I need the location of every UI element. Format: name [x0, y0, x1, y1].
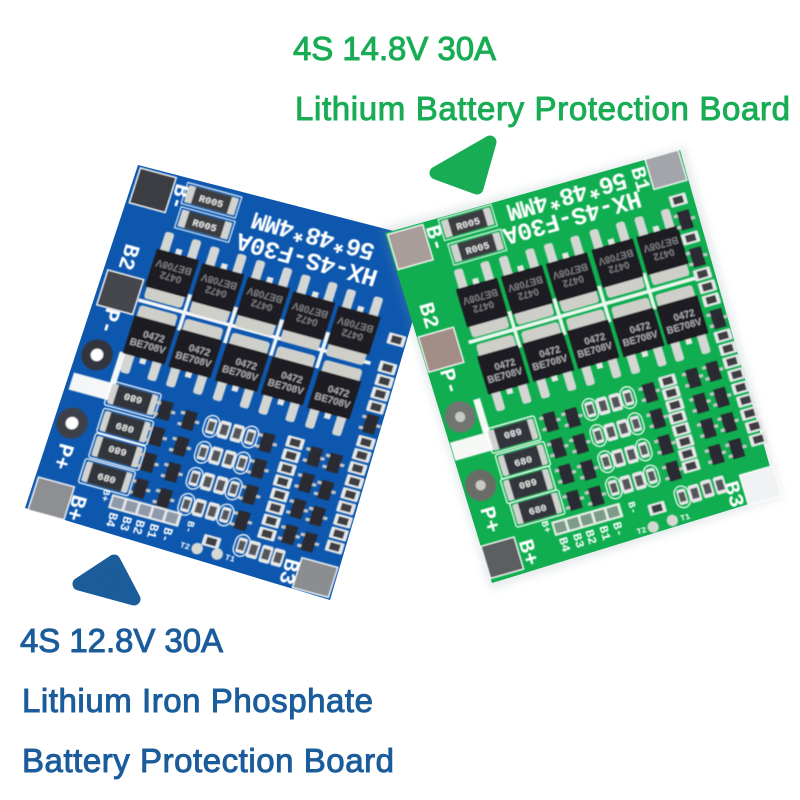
silk: B2: B2	[112, 241, 144, 273]
connector labels: B1	[595, 524, 613, 542]
pad: B-	[129, 168, 176, 213]
MOSFET row: top: 0472	[295, 311, 320, 327]
MOSFET row: bottom: BE708V	[221, 364, 260, 384]
test points T1 T2: T2	[636, 526, 648, 538]
resistor column: right edge	[320, 332, 411, 555]
control IC rows	[537, 378, 687, 514]
MOSFET row: top: BE708V	[245, 285, 284, 305]
MOSFET row: top	[450, 207, 692, 339]
pad: B3	[739, 466, 782, 505]
silk: B-: B-	[162, 181, 194, 213]
resistor column: middle	[256, 435, 306, 542]
power resistors 680	[485, 415, 565, 528]
power resistors 680: 680	[123, 389, 144, 406]
title line: Lithium Battery Protection Board: Lithium Battery Protection Board	[295, 90, 790, 127]
MOSFET row: top: BE708V	[551, 260, 589, 281]
MOSFET row: top: BE708V	[641, 233, 679, 254]
title line: Battery Protection Board: Battery Protection Board	[22, 742, 394, 779]
MOSFET row: bottom: BE708V	[531, 353, 569, 374]
MOSFET row: top: BE708V	[291, 299, 330, 319]
MOSFET row: bottom: 0472	[672, 307, 697, 324]
hole: P-	[441, 398, 479, 436]
green board components	[386, 147, 784, 579]
shunt resistor 1	[438, 205, 497, 241]
resistor column: right edge	[668, 190, 768, 450]
blue board components	[26, 167, 439, 597]
test points T1 T2	[179, 539, 237, 565]
shunt resistor 2	[175, 207, 235, 242]
pad: B+	[28, 477, 74, 520]
test points T1 T2	[635, 510, 692, 538]
connector pads B4 to B-	[108, 494, 182, 527]
connector labels: B3	[116, 514, 134, 532]
bottom resistor group	[672, 474, 729, 509]
silk: B-: B-	[419, 223, 450, 255]
silk: P-: P-	[433, 366, 465, 398]
power resistors 680: 680	[517, 474, 538, 491]
connector labels: B+	[538, 519, 552, 535]
connector labels: B1	[143, 522, 161, 540]
silk: P+: P+	[474, 504, 505, 536]
silk: B3: B3	[272, 555, 304, 587]
silk: B3: B3	[717, 479, 748, 511]
MOSFET row: bottom: BE708V	[266, 377, 305, 398]
MOSFET row: top: BE708V	[506, 273, 544, 294]
MOSFET row: top: 0472	[204, 283, 228, 299]
MOSFET row: bottom: 0472	[583, 332, 607, 348]
MOSFET row: bottom: BE708V	[576, 340, 614, 361]
test points T1 T2: T2	[179, 540, 191, 552]
MOSFET row: bottom	[116, 304, 366, 437]
MOSFET row: top: 0472	[561, 272, 585, 289]
white bridge strip	[440, 398, 495, 461]
shunt resistor 2	[448, 229, 507, 265]
power resistors 680: 680	[527, 502, 549, 519]
connector pads B4 to B-	[551, 503, 624, 536]
connector labels: B-	[624, 500, 639, 516]
MOSFET row: bottom: BE708V	[128, 336, 167, 357]
silk: model: HX-4S-F30A	[232, 225, 382, 291]
MOSFET row: bottom: 0472	[628, 320, 653, 337]
test points T1 T2: T1	[224, 553, 236, 565]
MOSFET row: top: 0472	[606, 258, 631, 275]
test points T1 T2: T1	[680, 513, 692, 524]
silk: B2: B2	[412, 300, 444, 332]
title line: 4S 12.8V 30A: 4S 12.8V 30A	[20, 622, 223, 659]
white bridge strip	[69, 342, 126, 401]
connector labels: B-	[609, 520, 626, 538]
MOSFET row: top: 0472	[340, 326, 365, 342]
panel: blue PCB board	[25, 165, 439, 600]
shunt resistor 1: R005	[197, 193, 225, 211]
pad: B+	[481, 537, 524, 579]
MOSFET row: top: BE708V	[154, 256, 193, 277]
power resistors 680: 680	[502, 424, 523, 441]
MOSFET row: top: 0472	[516, 285, 540, 302]
IC pairs: right	[681, 359, 749, 466]
white grid between MOSFETs	[133, 282, 376, 381]
MOSFET row: bottom: 0472	[493, 357, 518, 374]
title line: Lithium Iron Phosphate: Lithium Iron Phosphate	[22, 682, 373, 719]
pad: B2	[97, 270, 144, 315]
hole: P-	[77, 336, 117, 374]
IC pairs: right	[276, 445, 347, 554]
MOSFET row: bottom: BE708V	[313, 391, 352, 412]
MOSFET row: top: BE708V	[200, 271, 239, 291]
MOSFET row: bottom: 0472	[141, 329, 166, 346]
silk: model: HX-4S-F30A	[499, 183, 644, 249]
connector labels	[538, 495, 644, 558]
MOSFET row: top: 0472	[158, 268, 183, 285]
control IC rows	[126, 399, 281, 533]
silk: P+: P+	[46, 440, 78, 472]
pad: B-	[388, 224, 433, 270]
power resistors 680: 680	[107, 441, 129, 458]
resistor column: middle	[656, 373, 703, 474]
bottom resistor group	[231, 533, 287, 568]
silk: board size: 56*48*4MM	[248, 204, 379, 265]
board shadow	[380, 146, 783, 590]
connector labels: B+	[97, 487, 112, 503]
hole: P+	[461, 466, 500, 505]
title line: 4S 14.8V 30A: 4S 14.8V 30A	[293, 30, 496, 67]
MOSFET row: top: 0472	[249, 296, 274, 313]
connector labels: B2	[582, 528, 599, 546]
white grid between MOSFETs	[463, 260, 701, 361]
power resistors 680	[78, 380, 163, 497]
shunt resistor 2: R005	[464, 240, 491, 258]
connector labels: B-	[157, 526, 175, 544]
MOSFET row: top: BE708V	[461, 286, 499, 306]
MOSFET row: top: 0472	[471, 298, 495, 314]
MOSFET row: bottom: 0472	[234, 357, 259, 373]
panel: green PCB board	[385, 147, 784, 583]
MOSFET row: top: BE708V	[336, 314, 375, 334]
connector labels: B-	[181, 519, 197, 534]
hole: P+	[52, 404, 92, 442]
silk: board size: 56*48*4MM	[503, 164, 630, 225]
MOSFET row: top: BE708V	[596, 246, 635, 267]
MOSFET row: bottom: BE708V	[486, 366, 525, 387]
power resistors 680: 680	[114, 421, 135, 437]
green board surface	[385, 150, 778, 583]
MOSFET row: bottom: 0472	[279, 370, 304, 387]
MOSFET row: bottom: 0472	[538, 344, 563, 361]
shunt resistor 2: R005	[190, 218, 218, 236]
icon: green triangle pointer	[436, 142, 490, 188]
pad: B3	[292, 558, 338, 597]
connector labels	[89, 487, 199, 549]
shunt resistor 1: R005	[455, 216, 482, 234]
connector labels: B3	[569, 532, 586, 550]
MOSFET row: bottom	[474, 283, 714, 414]
thermistor	[647, 500, 667, 516]
silk: B+: B+	[59, 492, 91, 523]
silk: B+: B+	[512, 537, 543, 569]
silk: P-: P-	[92, 305, 124, 337]
shunt resistor 1	[181, 182, 242, 218]
MOSFET row: top: 0472	[651, 246, 676, 262]
connector labels: B4	[555, 535, 573, 554]
heading: green product title	[293, 30, 790, 127]
MOSFET row: bottom: 0472	[326, 384, 351, 400]
MOSFET row: bottom: BE708V	[665, 316, 704, 337]
MOSFET row: top	[139, 230, 389, 366]
pad: B1	[645, 150, 687, 189]
power resistors 680: 680	[95, 471, 117, 487]
MOSFET row: bottom: BE708V	[622, 329, 660, 349]
MOSFET row: bottom: 0472	[187, 343, 212, 359]
power resistors 680: 680	[513, 454, 534, 471]
silk: B1: B1	[624, 164, 653, 195]
MOSFET row: bottom: BE708V	[174, 350, 213, 370]
connector labels: B2	[129, 518, 147, 536]
heading: blue product title	[20, 622, 394, 779]
blue board surface	[25, 165, 436, 600]
icon: blue triangle pointer	[79, 561, 134, 599]
connector labels: B4	[101, 511, 120, 529]
thermistor	[201, 534, 222, 549]
pad: B2	[418, 327, 464, 372]
